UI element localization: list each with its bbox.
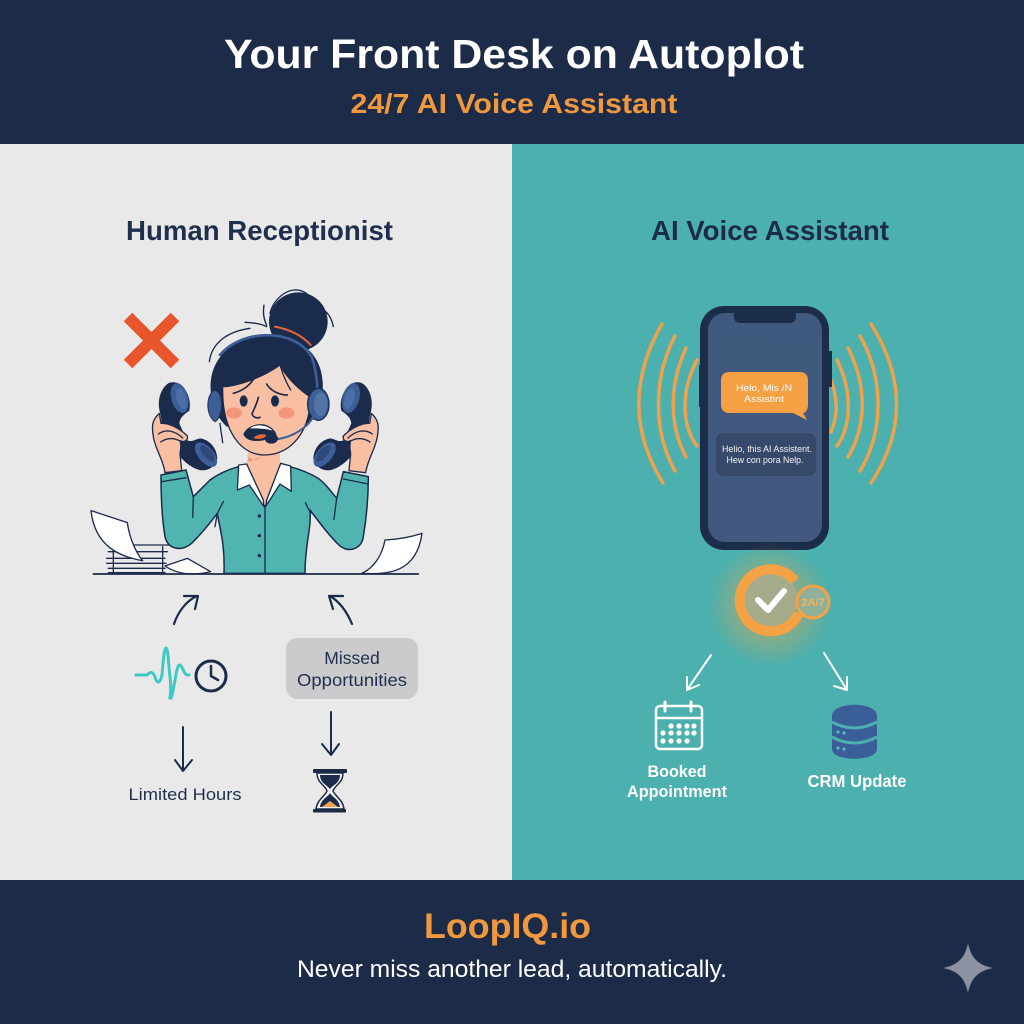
icon: check <box>758 591 784 610</box>
chat bubble: dark: Hew con pora Nelp. <box>726 455 804 466</box>
arrow: down to hourglass <box>322 712 339 755</box>
illustration: stressed receptionist <box>91 290 422 574</box>
icon: clock <box>196 661 226 691</box>
tagline: Never miss another lead, automatically. <box>297 956 727 983</box>
desk line <box>93 571 418 576</box>
hair back and bun <box>211 292 328 427</box>
label: booked appointment: Booked <box>648 762 706 781</box>
arrow: down to limited hours <box>175 727 192 771</box>
subtitle: 24/7 AI Voice Assistant <box>350 88 678 119</box>
icon: calendar <box>656 702 702 749</box>
brand name: LoopIQ.io <box>424 907 591 946</box>
eyes, brows, nose <box>240 395 248 407</box>
arrow: up-right to receptionist <box>174 596 198 624</box>
panel: AI voice assistant background <box>512 144 1024 880</box>
chat bubble: orange: Assistint <box>744 394 785 404</box>
neck <box>247 450 280 504</box>
left handset and hand <box>152 381 221 473</box>
arrow: up-left to receptionist <box>329 596 352 624</box>
headset <box>220 335 317 390</box>
blush <box>226 407 242 419</box>
chat bubble: dark <box>716 433 816 476</box>
callout: missed opportunities: Missed <box>324 648 380 668</box>
label: booked appointment: Appointment <box>627 782 727 801</box>
icon: red X <box>128 317 175 364</box>
callout: missed opportunities: Opportunities <box>297 670 407 690</box>
label: booked appointment <box>627 762 727 801</box>
heading: human receptionist: Human Receptionist <box>126 215 393 246</box>
torso and arms <box>161 467 368 573</box>
header band <box>0 0 1024 144</box>
title: Your Front Desk on Autoplot <box>224 31 804 77</box>
right handset and hand <box>309 381 378 473</box>
heading: AI voice assistant: AI Voice Assistant <box>651 215 889 246</box>
icon: pulse wave <box>136 648 189 698</box>
badge: check and 24/7 <box>708 543 832 667</box>
icon: sound waves right <box>831 324 896 483</box>
icon: sparkle <box>943 943 993 993</box>
callout: missed opportunities <box>286 638 418 699</box>
icon: sound waves left <box>639 324 697 483</box>
mouth <box>243 424 277 441</box>
chat bubble: orange <box>721 372 808 420</box>
face <box>223 365 310 455</box>
label: CRM update: CRM Update <box>808 771 907 791</box>
icon: database <box>832 705 877 759</box>
panel: human receptionist background <box>0 144 512 880</box>
arrow: down-left to booked appointment <box>687 655 711 690</box>
chat bubble: dark: Helio, this AI Assistent. <box>722 444 812 455</box>
icon: hourglass <box>313 769 347 812</box>
phone screen <box>708 313 822 542</box>
label: limited hours: Limited Hours <box>128 785 242 804</box>
footer band <box>0 880 1024 1024</box>
badge: check and 24/7: 2A/7 <box>801 597 825 609</box>
phone <box>699 306 832 550</box>
phone notch <box>734 312 796 323</box>
collar <box>237 464 264 507</box>
chat bubble: orange: Helo, Mis /N <box>736 383 792 393</box>
desk papers <box>91 511 422 574</box>
icon: 24/7 circle <box>797 586 829 618</box>
arrow: down-right to CRM update <box>824 653 847 690</box>
